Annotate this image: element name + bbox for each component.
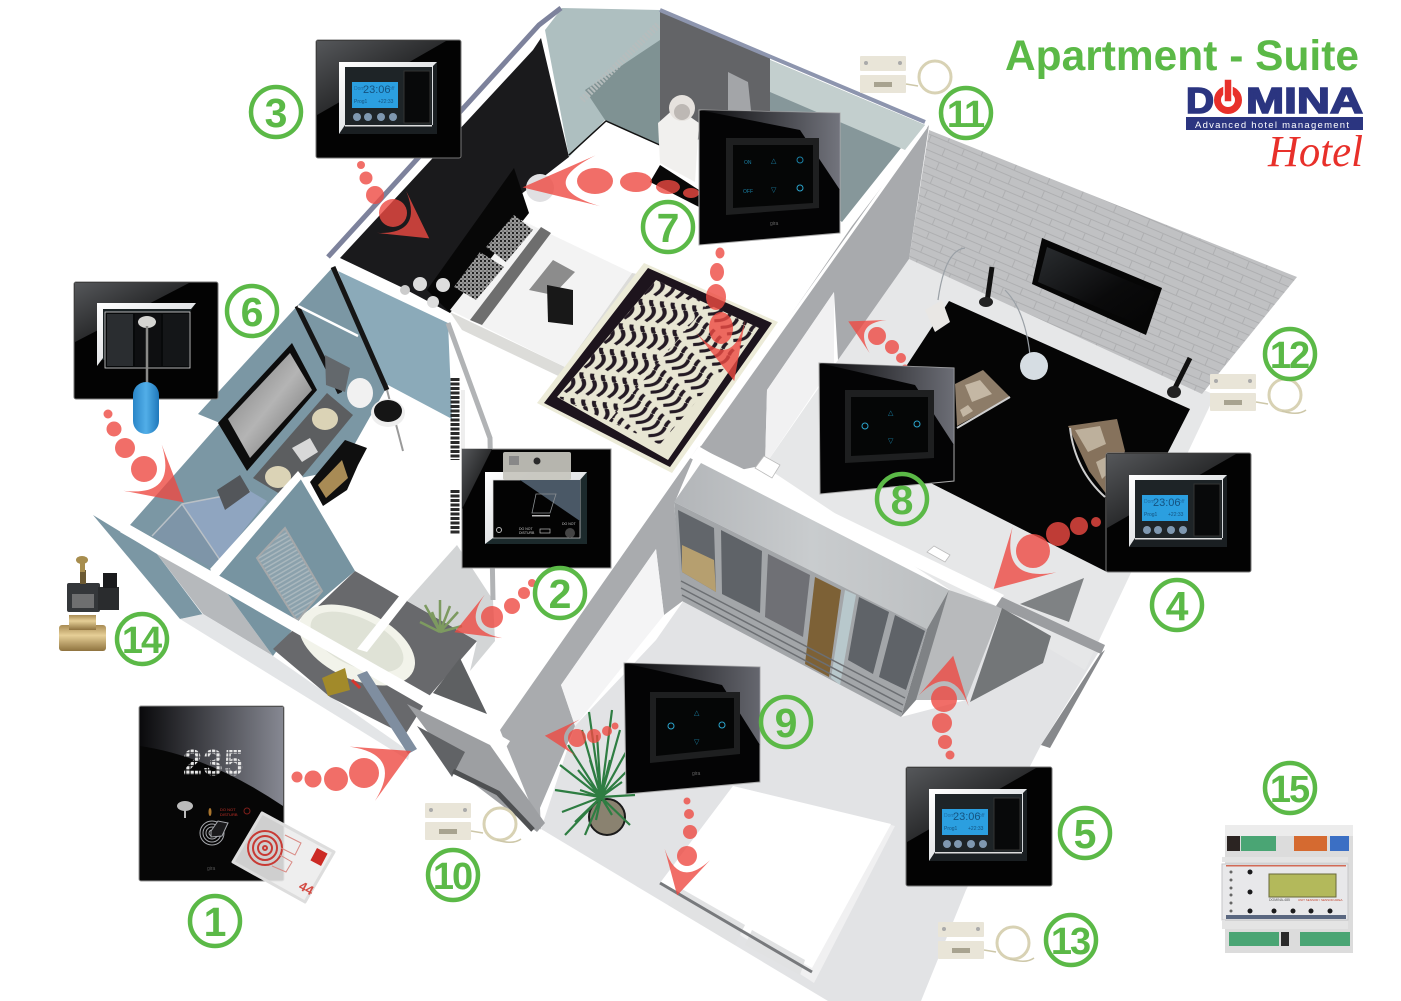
title: Apartment - Suite [1005,32,1359,80]
panel 7: touch control [699,110,840,245]
number labels [122,90,1310,963]
panel 2: door module with card holder [462,449,611,568]
zebra rug [537,263,778,473]
lcd screen: Dom [944,813,955,819]
number labels: 10 [433,856,472,898]
small plant in bathroom [420,600,462,632]
arrow 7 down [696,248,759,387]
panel 8: touch control: ▽ [888,438,894,445]
sensor 11: magnetic contact [860,56,951,93]
logo: Domina Hotel: Hotel [1267,127,1363,176]
lcd screen: Prog1 [944,826,958,832]
logo: Domina Hotel: D [1186,80,1214,121]
float [133,382,159,434]
wall: bathroom lower partition [120,471,545,832]
bathroom floor and bathtub [273,545,495,735]
lcd screen: Dom [1144,499,1155,505]
lcd screen: off [979,813,985,819]
lcd screen [1142,495,1188,521]
lcd screen: Prog1 [354,99,368,105]
panel 2: door module with card holder: DO NOT [519,527,533,531]
lcd screen: Dom [354,86,365,92]
number labels: 6 [241,289,263,335]
number labels: 4 [1166,583,1189,629]
panel 9: touch control: △ [694,710,700,717]
panel 8: touch control [819,363,954,494]
arrow 2 [446,579,536,654]
lcd screen: +22:33 [378,99,394,105]
key card [233,813,334,902]
chest of drawers and vase [650,95,699,207]
arrow 9 left [544,717,618,757]
lcd screen [942,809,988,835]
radiators [755,456,950,562]
number labels: 8 [891,477,913,523]
number labels: 14 [122,620,162,662]
panel 9: touch control [624,663,760,794]
logo: Domina Hotel: MINA [1246,80,1363,121]
lcd screen: off [389,86,395,92]
sensor 12: magnetic contact [1210,374,1306,413]
arrow 8 [840,305,908,372]
wall: divider between living room and lower bedroom [690,447,1105,748]
number labels: 3 [265,90,287,136]
panel 7: touch control: △ [771,158,777,165]
number labels: 15 [1270,769,1310,811]
panel 3: room thermostat [316,40,461,158]
panel 2: door module with card holder: DISTURB [519,531,535,535]
lcd screen [352,82,398,108]
arrow 7 left [520,155,699,213]
room number: 235 [182,744,244,787]
logo: Domina Hotel: Advanced hotel management [1195,120,1349,131]
potted plant [555,710,635,835]
key card: 44 [296,878,317,899]
arrow 1 [292,724,424,801]
card in holder [503,452,571,480]
number labels: 9 [775,700,797,746]
wall: partition between top bedroom and living room [700,125,929,470]
status icons: DO NOT [220,807,236,812]
status icons [177,801,250,818]
lcd screen: 23:06 [953,811,981,823]
wall: brick wall [909,130,1297,394]
number labels: 12 [1270,335,1309,377]
panel 1: card reader with room number display: gira [207,866,216,872]
wardrobe [674,463,949,717]
panel 8: touch control: △ [888,410,894,417]
room: bathroom walls [93,267,470,760]
status icons: DISTURB [220,812,238,817]
sensor 10: magnetic contact [425,803,521,842]
television [1032,238,1162,335]
panel 6: pull cord switch [74,282,218,434]
arrow 3 [357,161,444,259]
number labels: 1 [204,899,226,945]
number labels: 2 [549,571,571,617]
carpet: living room [885,301,1190,572]
sensor 13: magnetic contact [938,922,1034,961]
lcd screen: +22:33 [968,826,984,832]
panel 2: door module with card holder: DO NOT [562,522,576,526]
number labels: 13 [1051,921,1090,963]
bathroom window and wall frame [448,323,493,600]
floor lamps and speakers [925,248,1190,398]
number labels: 11 [947,94,985,136]
lcd screen: off [1179,499,1185,505]
number callouts [117,87,1315,965]
panel 4: room thermostat [1106,453,1251,572]
room: lower bedroom floor [541,600,1100,1001]
arrow 5 [919,650,978,760]
lcd screen: Prog1 [1144,512,1158,518]
wall: left wall of lower bedroom with door panel [500,447,698,830]
panel 5: room thermostat [906,767,1052,886]
solenoid valve [59,556,119,651]
panel 9: touch control: ▽ [694,739,700,746]
logo: Domina Hotel [1186,79,1363,176]
panel 7: touch control: ON [744,160,752,166]
room: living room floor [765,259,1215,670]
reader icon [200,821,228,845]
lcd screen: 23:06 [1153,497,1181,509]
number labels: 7 [657,205,679,251]
arrow 9 down [654,798,710,901]
arrow 6 [104,410,203,525]
panel 9: touch control: gira [692,771,701,777]
panel 1: card reader with room number display [139,706,284,881]
bathroom mirror, counter and fixtures [217,267,405,510]
lcd screen: +22:33 [1168,512,1184,518]
lounge chairs [955,370,1125,497]
DIN rail controller [1222,825,1353,953]
panel 7: touch control: OFF [743,189,753,195]
panel 7: touch control: gira [770,221,779,227]
DIN rail controller: DOMINA-485 [1269,898,1290,902]
bed in the top bedroom [400,168,652,383]
lcd screen: 23:06 [363,84,391,96]
room: top bedroom walls [328,8,925,313]
DIN rail controller: UNIT SENSOR / SENSOR AREA [1298,898,1342,902]
arrow 4 [972,517,1101,612]
number labels: 5 [1074,811,1096,857]
panel 7: touch control: ▽ [771,187,777,194]
